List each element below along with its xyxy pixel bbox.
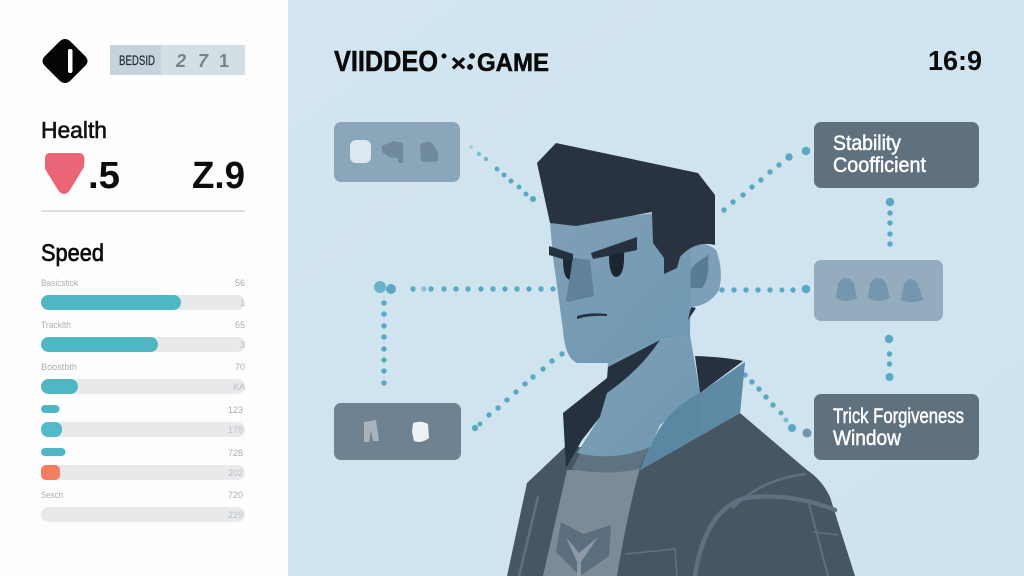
bar row 2: Tracklth	[41, 320, 71, 330]
mouth	[577, 313, 607, 319]
connector: top left	[469, 145, 536, 202]
title: ×	[451, 50, 466, 76]
title: GAME	[477, 49, 549, 77]
bar row 2	[41, 320, 245, 352]
bar row 1: Basicstick	[41, 278, 78, 288]
character illustration	[507, 143, 855, 576]
dotted connectors	[374, 145, 894, 438]
bar chart: speed stats	[41, 278, 245, 522]
connector: middle box to trick	[885, 335, 894, 381]
heading: speed: Speed	[41, 240, 104, 267]
dark front collar	[563, 340, 660, 468]
neck	[577, 335, 700, 456]
icon: helmet glyph	[420, 142, 438, 162]
bar row 6: 229	[228, 510, 243, 520]
callout: top left icons	[334, 122, 460, 182]
bar row 5	[41, 448, 245, 480]
bar row 4	[41, 405, 245, 437]
connector: lower left	[472, 351, 565, 431]
nose	[566, 258, 594, 302]
connector: stability to middle box	[886, 198, 894, 247]
bar row 3: Boostbth	[41, 362, 77, 372]
health maximum value: Z.9	[192, 155, 245, 197]
connector: head to middle box	[719, 285, 810, 293]
light jacket collar	[640, 362, 745, 470]
level badge: BEDSID	[119, 52, 155, 68]
level badge	[110, 45, 245, 75]
icon: character glyph two	[868, 278, 890, 301]
callout: stability coefficient: Stability	[833, 132, 901, 155]
level badge: 7	[198, 51, 209, 71]
ear	[686, 243, 721, 307]
bar row 6: Sesch	[41, 490, 63, 500]
connector: left vertical	[381, 300, 387, 386]
icon: game logo diamond	[42, 39, 88, 83]
heading: health: Health	[41, 117, 107, 143]
icon: character glyph one	[836, 278, 857, 301]
icon: character glyph three	[901, 279, 923, 302]
shirt emblem	[556, 522, 611, 576]
bar row 6: 720	[228, 490, 243, 500]
bar row 3: 70	[235, 362, 245, 372]
bar row 1: 1	[240, 298, 245, 308]
icon: white tile	[350, 140, 371, 163]
bar row 1	[41, 278, 245, 310]
connector: left horizontal	[374, 281, 556, 294]
face	[550, 212, 691, 363]
bar row 3	[41, 362, 245, 394]
bar row 3: KA	[233, 382, 245, 392]
bar row 2: 3	[240, 340, 245, 350]
bar row 2: 65	[235, 320, 245, 330]
callout: lower left icons	[334, 403, 461, 460]
eyes	[563, 252, 624, 280]
bar row 6	[41, 490, 245, 522]
level badge: 1	[219, 51, 229, 71]
callout: stability coefficient: Coofficient	[833, 154, 926, 177]
aspect ratio label: 16:9	[928, 45, 982, 76]
bar row 1: 56	[235, 278, 245, 288]
bar row 5: 728	[228, 448, 243, 458]
icon: white tile glyph	[412, 422, 429, 442]
callout: trick forgiveness window: Trick Forgiveness	[833, 405, 964, 428]
callout: trick forgiveness window	[814, 394, 979, 460]
brows	[549, 237, 637, 262]
title	[334, 46, 549, 78]
hair	[537, 143, 715, 274]
icon: grey tool glyph	[364, 420, 379, 442]
bar row 5: 202	[228, 468, 243, 478]
jacket stitching	[519, 474, 838, 576]
connector: collar to trick	[742, 372, 812, 438]
title: VIIDDEO	[334, 46, 438, 78]
callout: middle icons	[814, 260, 943, 321]
level badge: 2	[175, 51, 186, 71]
health value: .5	[88, 155, 120, 197]
callout: stability coefficient	[814, 122, 979, 188]
bar row 4: 178	[228, 425, 243, 435]
shirt	[543, 447, 650, 576]
panel: stats sidebar	[0, 0, 288, 576]
icon: health heart	[45, 153, 84, 194]
bar row 4: 123	[228, 405, 243, 415]
dark back collar	[695, 356, 743, 393]
connector: head to stability	[721, 147, 810, 213]
jacket	[507, 413, 855, 576]
icon: controller glyph	[382, 141, 403, 163]
callout: trick forgiveness window: Window	[833, 427, 902, 450]
